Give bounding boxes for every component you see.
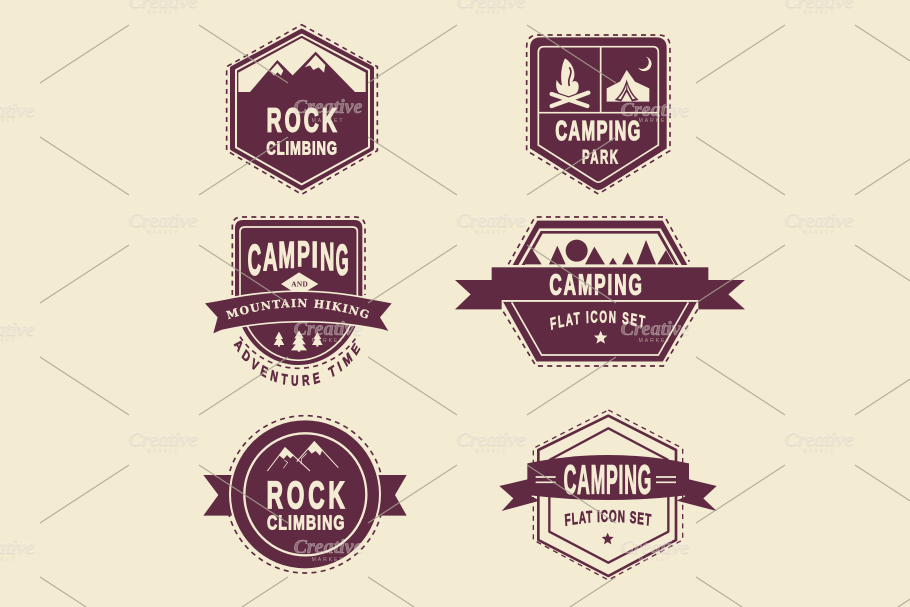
ribbon: mountain hiking: MOUNTAIN HIKING <box>226 298 369 320</box>
watermarks: Creative <box>294 318 363 340</box>
icon: tent and moon <box>607 57 652 102</box>
watermarks: MARKET <box>312 557 344 563</box>
badge: camping outline hexagon with ribbon <box>499 409 717 580</box>
badge: rock climbing round seal <box>203 416 407 573</box>
icon: star <box>602 533 614 544</box>
curved text: flat icon set: FLAT ICON SET <box>550 310 646 330</box>
watermarks: Creative <box>785 209 854 231</box>
watermarks: MARKET <box>639 338 671 344</box>
watermarks: MARKET <box>147 449 179 455</box>
arched CAMPING lettering: M <box>278 235 295 276</box>
watermarks: Creative <box>457 209 526 231</box>
arched CAMPING lettering: P <box>297 235 310 275</box>
ribbon: mountain hiking <box>205 290 392 334</box>
heading: CLIMBING: CLIMBING <box>267 511 344 534</box>
watermarks: Creative <box>621 99 690 121</box>
icon: star <box>594 331 607 344</box>
arched CAMPING lettering: N <box>320 235 334 279</box>
watermarks: Creative <box>129 428 198 450</box>
icon: campfire <box>552 58 588 106</box>
badge: camping and mountain hiking shield <box>205 216 392 386</box>
watermarks: MARKET <box>803 230 835 236</box>
watermarks: MARKET <box>147 230 179 236</box>
ribbon: camping <box>455 267 745 309</box>
watermarks: MARKET <box>803 10 835 16</box>
heading: CLIMBING: CLIMBING <box>266 138 337 159</box>
watermarks: Creative <box>785 428 854 450</box>
watermarks: MARKET <box>803 449 835 455</box>
heading: ROCK: ROCK <box>267 474 345 516</box>
heading: PARK: PARK <box>582 148 618 169</box>
curved text: flat icon set: FLAT ICON SET <box>564 510 652 526</box>
watermarks: MARKET <box>475 230 507 236</box>
watermarks: Creative <box>294 536 363 558</box>
heading: ROCK: ROCK <box>267 102 337 139</box>
watermarks: MARKET <box>312 338 344 344</box>
icon: outlined mountains <box>267 442 338 471</box>
diamond: AND <box>281 272 318 296</box>
arched CAMPING lettering: A <box>263 235 277 279</box>
ribbon: camping <box>499 455 717 511</box>
arched CAMPING lettering: I <box>311 235 318 275</box>
sun and mountain silhouettes <box>523 240 674 264</box>
arched CAMPING lettering: G <box>336 236 349 284</box>
watermarks: MARKET <box>475 449 507 455</box>
watermarks: Creative <box>621 318 690 340</box>
diamond: AND: AND <box>291 279 308 288</box>
heading: CAMPING: CAMPING <box>555 116 640 146</box>
watermarks: MARKET <box>639 118 671 124</box>
arched CAMPING lettering: C <box>248 236 261 283</box>
ribbon: camping: CAMPING <box>564 456 651 503</box>
badge: camping flat icon set wide hexagon <box>455 216 745 367</box>
lower panel <box>502 301 698 362</box>
badge: rock climbing hexagon <box>227 25 377 194</box>
watermarks: MARKET <box>312 118 344 124</box>
watermarks: MARKET <box>475 10 507 16</box>
watermarks: Creative <box>294 96 363 118</box>
ribbon tails <box>203 475 407 516</box>
ribbon: camping: CAMPING <box>549 270 642 302</box>
icon: pine trees <box>274 330 323 352</box>
watermarks: Creative <box>621 536 690 558</box>
curved text: adventure time: ADVENTURE TIME <box>234 340 360 386</box>
mountain scene <box>238 38 366 92</box>
watermarks: MARKET <box>147 10 179 16</box>
badge: camping park shield <box>527 35 670 194</box>
watermarks: Creative <box>129 209 198 231</box>
watermarks: MARKET <box>639 557 671 563</box>
arched CAMPING lettering <box>248 235 349 284</box>
watermarks: Creative <box>457 428 526 450</box>
